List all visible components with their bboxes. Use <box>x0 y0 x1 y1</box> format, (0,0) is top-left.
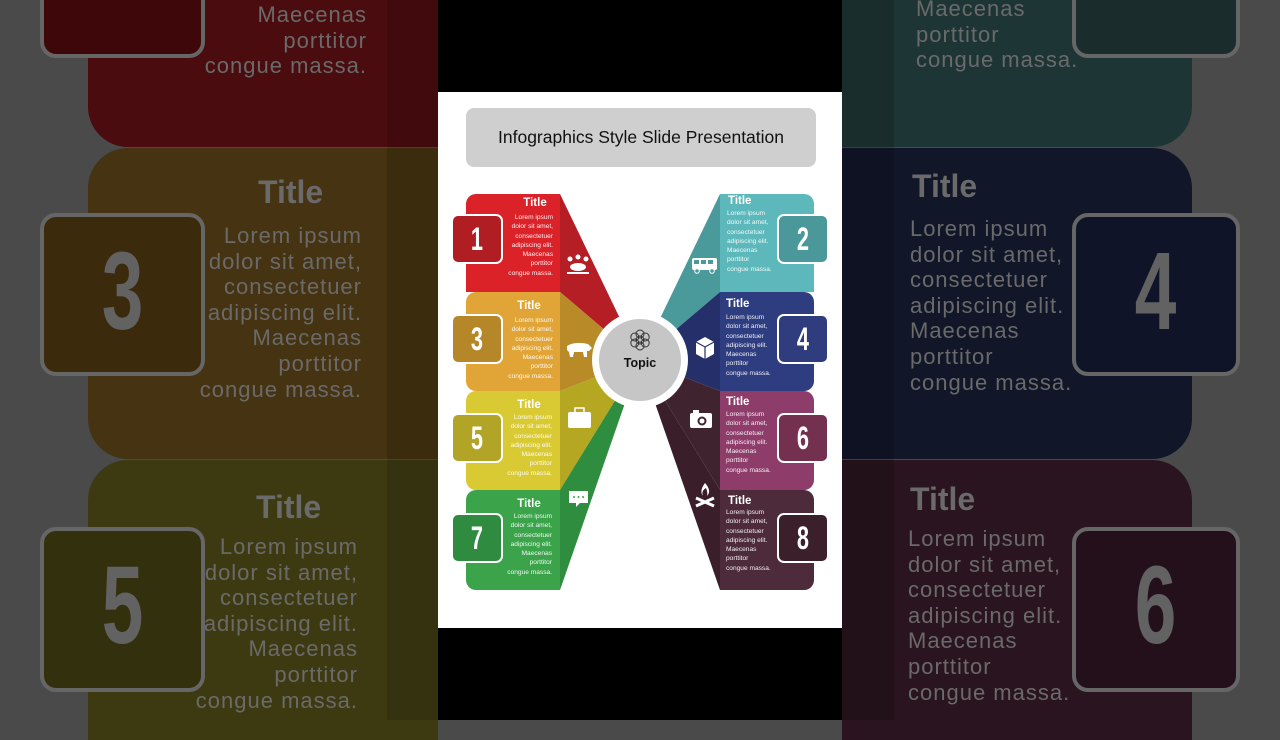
card 2: congue massa. <box>727 266 772 273</box>
card 5: porttitor <box>530 460 552 467</box>
background: left blurred panel: Title <box>256 489 321 525</box>
background: right blurred panel: porttitor <box>910 344 994 369</box>
background: left blurred panel: consectetuer <box>224 274 362 299</box>
card 7 <box>453 490 560 590</box>
background: left blurred panel: congue massa. <box>196 688 358 713</box>
card 6: Title <box>726 396 749 408</box>
background: left blurred panel: Maecenas <box>257 2 367 27</box>
card 4: congue massa. <box>726 370 771 377</box>
background: left blurred panel: 5 <box>102 544 143 667</box>
background: right blurred panel: adipiscing elit. <box>908 603 1062 628</box>
card 7: Lorem ipsum <box>514 513 552 520</box>
card 2: consectetuer <box>727 229 765 236</box>
card 6: Maecenas <box>726 448 756 455</box>
background: right blurred panel: Title <box>910 481 975 517</box>
card 5: 5 <box>471 420 483 456</box>
background: left blurred panel: Title <box>258 174 323 210</box>
card 5: Lorem ipsum <box>514 414 552 421</box>
background: right blurred panel: Lorem ipsum <box>910 216 1048 241</box>
icon: box <box>696 337 714 359</box>
card 3: dolor sit amet, <box>512 326 553 333</box>
card 8 <box>720 490 827 590</box>
card 4 <box>720 292 827 391</box>
background: right blurred panel: congue massa. <box>916 47 1078 72</box>
background: right blurred panel: Maecenas <box>908 628 1018 653</box>
card 4: consectetuer <box>726 333 764 340</box>
card 6: adipiscing elit. <box>726 439 767 446</box>
background: right blurred panel: 6 <box>1135 544 1177 667</box>
card 5: Maecenas <box>522 451 552 458</box>
card 2: Lorem ipsum <box>727 210 765 217</box>
background: left blurred panel: dolor sit amet, <box>205 560 358 585</box>
card 8: dolor sit amet, <box>726 518 767 525</box>
card 7: Maecenas <box>522 550 552 557</box>
card 7: congue massa. <box>507 569 552 576</box>
card 5: adipiscing elit. <box>511 442 552 449</box>
background: right blurred panel: Lorem ipsum <box>908 526 1046 551</box>
background: left blurred panel: 3 <box>102 230 143 353</box>
card 3: Title <box>517 300 541 312</box>
card 2: adipiscing elit. <box>727 238 768 245</box>
background: right blurred panel: porttitor <box>908 654 992 679</box>
card 1: 1 <box>471 221 483 257</box>
card 3: 3 <box>471 321 483 357</box>
card 3: consectetuer <box>515 336 553 343</box>
card 1: dolor sit amet, <box>512 223 553 230</box>
card 3: adipiscing elit. <box>512 345 553 352</box>
background: left blurred panel <box>40 0 438 740</box>
background: left blurred panel: Lorem ipsum <box>220 534 358 559</box>
card 4: Title <box>726 298 749 310</box>
background: left blurred panel: congue massa. <box>205 53 367 78</box>
background: right blurred panel: porttitor <box>916 22 1000 47</box>
card 6 <box>720 391 827 490</box>
background: left blurred panel: porttitor <box>283 28 367 53</box>
card 2: Maecenas <box>727 247 757 254</box>
card 8: porttitor <box>726 555 748 562</box>
card 6: 6 <box>797 420 809 456</box>
background: left blurred panel: Lorem ipsum <box>224 223 362 248</box>
card 3: porttitor <box>531 363 553 370</box>
card 1 <box>453 194 560 292</box>
card 1: adipiscing elit. <box>512 242 553 249</box>
card 8: consectetuer <box>726 528 764 535</box>
card 6: porttitor <box>726 457 748 464</box>
card 8: Title <box>728 495 751 507</box>
background: right blurred panel: dolor sit amet, <box>908 552 1061 577</box>
background: left blurred panel: Maecenas <box>252 325 362 350</box>
card 7: dolor sit amet, <box>511 522 552 529</box>
background: right blurred panel: consectetuer <box>910 267 1048 292</box>
card 1: porttitor <box>531 260 553 267</box>
background: right blurred panel: 4 <box>1135 230 1177 353</box>
card 1: congue massa. <box>508 270 553 277</box>
background: left blurred panel: adipiscing elit. <box>204 611 358 636</box>
background: right blurred panel: adipiscing elit. <box>910 293 1064 318</box>
slide panel <box>438 92 842 628</box>
card 1: Title <box>523 197 547 209</box>
background: right blurred panel: Title <box>912 168 977 204</box>
background: left blurred panel: congue massa. <box>200 377 362 402</box>
card 5 <box>453 391 560 490</box>
card 6: Lorem ipsum <box>726 411 764 418</box>
background: left blurred panel: dolor sit amet, <box>209 249 362 274</box>
card 3 <box>453 292 560 391</box>
card 6: congue massa. <box>726 467 771 474</box>
card 8: congue massa. <box>726 565 771 572</box>
card 2: dolor sit amet, <box>727 219 768 226</box>
card 8: Maecenas <box>726 546 756 553</box>
card 7: porttitor <box>530 559 552 566</box>
background: right blurred panel: congue massa. <box>908 680 1070 705</box>
icon: meeting table <box>567 254 589 274</box>
card 7: 7 <box>471 520 483 556</box>
card 8: Lorem ipsum <box>726 509 764 516</box>
icon: camera <box>690 410 712 428</box>
card 4: Maecenas <box>726 351 756 358</box>
background: left blurred panel: porttitor <box>278 351 362 376</box>
background: left blurred panel: porttitor <box>274 662 358 687</box>
topic label: Topic <box>624 356 656 370</box>
background: left blurred panel: Maecenas <box>248 636 358 661</box>
background: right blurred panel <box>842 0 1240 740</box>
topic circle <box>592 312 688 408</box>
icon: bear <box>567 343 592 357</box>
icon: lotus <box>630 330 650 350</box>
card 3: congue massa. <box>508 373 553 380</box>
card 3: Lorem ipsum <box>515 317 553 324</box>
card 4: Lorem ipsum <box>726 314 764 321</box>
card 8: 8 <box>797 520 809 556</box>
card 1: Lorem ipsum <box>515 214 553 221</box>
card 7: consectetuer <box>514 532 552 539</box>
title bar: Infographics Style Slide Presentation <box>498 127 784 147</box>
card 5: consectetuer <box>514 433 552 440</box>
card 4: 4 <box>797 321 809 357</box>
card 2 <box>720 194 827 292</box>
card 4: dolor sit amet, <box>726 323 767 330</box>
icon: bus <box>692 258 717 273</box>
background: left blurred panel: consectetuer <box>220 585 358 610</box>
icon: campfire <box>696 483 714 506</box>
card 3: Maecenas <box>523 354 553 361</box>
card 4: adipiscing elit. <box>726 342 767 349</box>
card 4: porttitor <box>726 360 748 367</box>
card 2: Title <box>728 195 751 207</box>
card 8: adipiscing elit. <box>726 537 767 544</box>
card 2: 2 <box>797 221 809 257</box>
background: right blurred panel: Maecenas <box>910 318 1020 343</box>
card 5: dolor sit amet, <box>511 423 552 430</box>
black bars <box>438 0 842 92</box>
icon: chat bubble <box>569 491 588 507</box>
card 1: consectetuer <box>515 233 553 240</box>
card 6: consectetuer <box>726 430 764 437</box>
background: right blurred panel: consectetuer <box>908 577 1046 602</box>
card 7: adipiscing elit. <box>511 541 552 548</box>
card 1: Maecenas <box>523 251 553 258</box>
background: right blurred panel: dolor sit amet, <box>910 242 1063 267</box>
card 6: dolor sit amet, <box>726 420 767 427</box>
card 5: congue massa. <box>507 470 552 477</box>
icon: briefcase <box>568 408 591 428</box>
background: left blurred panel: adipiscing elit. <box>208 300 362 325</box>
card 7: Title <box>517 498 541 510</box>
title bar <box>466 108 816 167</box>
card 2: porttitor <box>727 256 749 263</box>
card 5: Title <box>517 399 541 411</box>
background: right blurred panel: congue massa. <box>910 370 1072 395</box>
